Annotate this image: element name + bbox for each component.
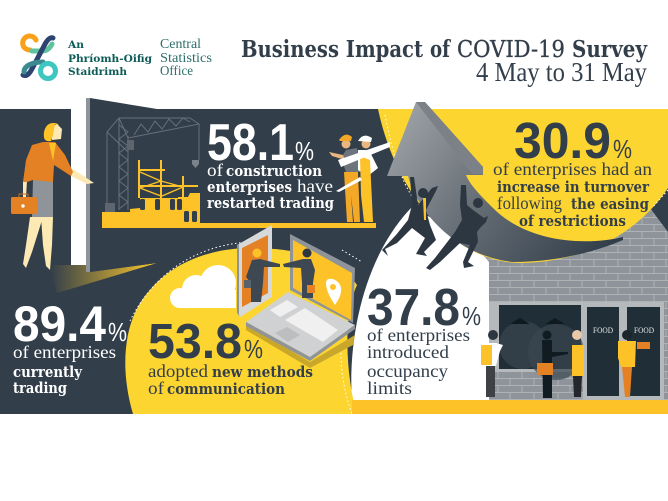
icon: logo symbol (23, 36, 56, 78)
stat: 53.8% communication: 53.8 (148, 315, 242, 369)
title: COVID-19 (457, 37, 565, 63)
panel: turnover yellow area (378, 109, 668, 263)
laptop shadow (246, 324, 355, 368)
stat: 58.1% construction: 58.1 (207, 114, 294, 172)
stat: 37.8% occupancy: % (462, 301, 481, 331)
stat: 30.9% turnover: % (613, 134, 632, 164)
stat: 53.8% communication: new methods (212, 363, 313, 381)
illustration: phone and laptop handshake (237, 225, 355, 368)
logo text: English name (160, 37, 212, 79)
title: Survey (572, 36, 648, 63)
logo text: Irish name: Staidrimh (68, 66, 127, 78)
laptop screen (290, 234, 355, 323)
stat: 53.8% communication (148, 315, 313, 398)
logo text: Irish name: An (67, 39, 84, 51)
logo text: Irish name (67, 39, 153, 78)
stat: 58.1% construction: have (297, 176, 333, 196)
icon: cloud (170, 265, 236, 308)
logo: Central Statistics Office (23, 36, 212, 79)
stat: 30.9% turnover: the easing (571, 195, 649, 213)
stat: 37.8% occupancy: introduced (367, 342, 449, 362)
laptop base (246, 292, 355, 357)
stat: 58.1% construction: % (295, 136, 314, 166)
illustration: shop front (489, 302, 664, 400)
stat: 30.9% turnover: 30.9 (514, 112, 611, 169)
stat: 89.4% trading (13, 296, 127, 397)
stat: 53.8% communication: communication (167, 380, 285, 398)
title: 4 May to 31 May (476, 57, 647, 87)
stat: 89.4% trading: of enterprises (13, 342, 116, 362)
stat: 30.9% turnover: of enterprises had an (493, 159, 652, 179)
illustration: crane (105, 118, 199, 212)
illustration: construction workers (329, 135, 390, 222)
illustration: woman with briefcase (11, 123, 94, 270)
stat: 89.4% trading: trading (13, 379, 67, 397)
dotted outline of communication area (130, 242, 362, 414)
keyboard (285, 308, 338, 342)
illustration: doorway (50, 98, 157, 293)
white occupancy area (351, 207, 668, 414)
icon: location pin (326, 279, 341, 305)
dotted outline of turnover area (385, 115, 668, 208)
title (241, 36, 648, 87)
illustration: businessman pushing arrow (382, 177, 438, 256)
title: Business Impact (241, 36, 423, 63)
stat: 53.8% communication: of (148, 378, 164, 398)
stat: 37.8% occupancy: limits (367, 378, 412, 398)
brick wall (480, 200, 668, 400)
stat: 58.1% construction: construction (226, 162, 322, 180)
logo text: English name: Central (160, 37, 201, 52)
stat: 58.1% construction: of (207, 160, 223, 180)
illustration: queueing customers (481, 330, 636, 398)
stat: 37.8% occupancy: 37.8 (367, 279, 460, 337)
bottom strip (352, 400, 668, 414)
man on laptop (283, 259, 315, 298)
illustration: rising arrow (387, 102, 623, 262)
stat: 89.4% trading: 89.4 (13, 296, 106, 352)
stat: 30.9% turnover: of restrictions (519, 212, 626, 230)
stat: 58.1% construction (207, 114, 334, 212)
stat: 58.1% construction: enterprises (207, 178, 292, 196)
dark right corner (650, 185, 668, 232)
title: of (430, 36, 452, 63)
man in phone (246, 259, 280, 302)
logo text: English name: Office (160, 64, 193, 79)
stat: 30.9% turnover: following (497, 193, 562, 213)
stat: 37.8% occupancy (367, 279, 481, 398)
panel: communication yellow area (125, 248, 357, 414)
stat: 53.8% communication: adopted (148, 361, 208, 381)
dark background panel (0, 109, 668, 414)
stat: 30.9% turnover: increase in turnover (497, 178, 650, 196)
logo text: English name: Statistics (160, 51, 212, 66)
illustration: shop front: FOOD (593, 326, 613, 335)
stat: 37.8% occupancy: occupancy (367, 361, 448, 381)
stat: 30.9% turnover (493, 112, 652, 230)
stat: 53.8% communication: % (244, 334, 263, 364)
stat: 37.8% occupancy: of enterprises (367, 325, 470, 345)
stat: 89.4% trading: % (108, 317, 127, 347)
stat: 89.4% trading: currently (13, 363, 83, 381)
logo text: Irish name: Phríomh-Oifig (68, 53, 153, 65)
stat: 58.1% construction: restarted trading (207, 194, 334, 212)
illustration: second businessman pushing arrow (426, 185, 488, 270)
illustration: shop front: FOOD (634, 326, 654, 335)
phone (237, 225, 272, 317)
illustration: building under construction (102, 160, 376, 228)
